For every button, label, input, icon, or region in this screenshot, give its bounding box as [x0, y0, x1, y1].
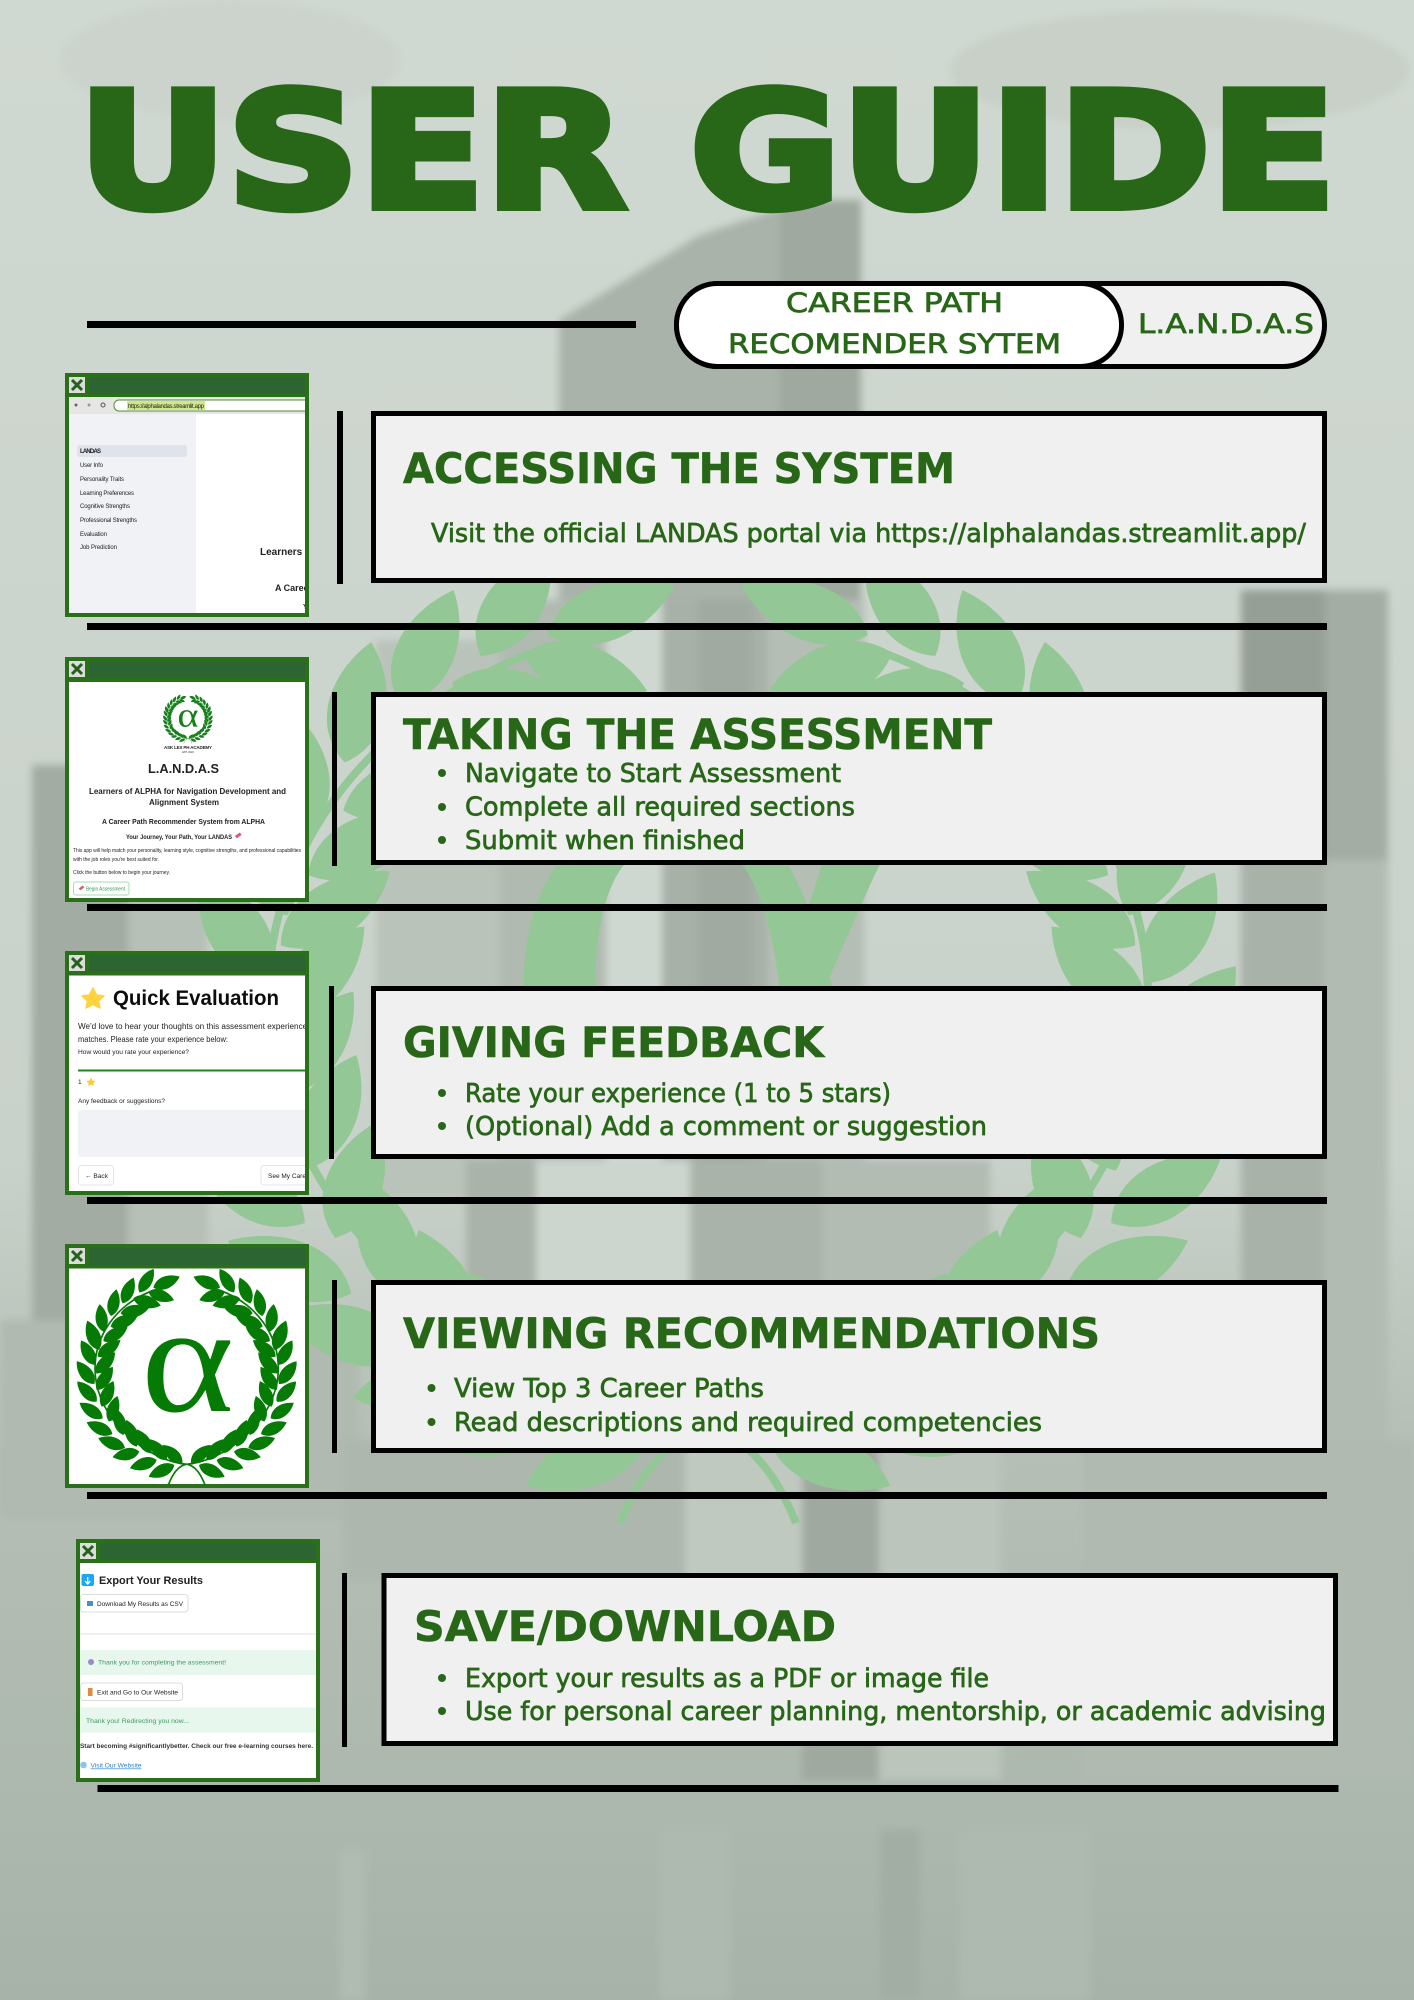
step 2 screenshot window: with the job roles you're best suited for. [73, 857, 159, 863]
pill label: landas: L.A.N.D.A.S [1138, 309, 1314, 340]
step 3 screenshot window [67, 953, 331, 1193]
bullet list [438, 1079, 987, 1142]
heading: ACCESSING THE SYSTEM [403, 444, 955, 493]
step 3 screenshot window: ← Back [85, 1173, 109, 1180]
step 2 screenshot window: Your Journey, Your Path, Your LANDAS [126, 834, 233, 841]
step 3 screenshot window: 1 [78, 1079, 82, 1086]
panel: taking the assessment [374, 694, 1324, 862]
step 5 screenshot window [78, 1541, 318, 1780]
bullet list: View Top 3 Career Paths [454, 1374, 764, 1404]
step 1 screenshot window: User Info [80, 463, 104, 469]
step 1 screenshot window: Evaluation [80, 532, 107, 538]
bullet list: Complete all required sections [465, 792, 855, 822]
panel: viewing recommendations [374, 1282, 1324, 1450]
step 1 screenshot window: Learning Preferences [80, 491, 134, 497]
bullet list: Read descriptions and required competencies [454, 1408, 1042, 1438]
step 3 screenshot window: Any feedback or suggestions? [78, 1098, 165, 1105]
step 5 screenshot window: Start becoming #significantlybetter. Check our free e-learning courses here. [80, 1743, 313, 1750]
panel: giving feedback [374, 988, 1324, 1156]
step 2 screenshot window: Alignment System [149, 797, 219, 807]
step 2 screenshot window: L.A.N.D.A.S [148, 761, 219, 776]
bullet list: Navigate to Start Assessment [465, 759, 841, 789]
icon: laurel wreath with alpha [72, 1266, 302, 1485]
background wreath emblem: α [493, 511, 917, 1300]
heading: GIVING FEEDBACK [403, 1018, 825, 1067]
logo: ASK LEX PH ACADEMY [164, 745, 212, 750]
step 5 screenshot window: Export Your Results [99, 1575, 203, 1587]
bullet list [428, 1374, 1042, 1438]
step 3 screenshot window: See My Career [268, 1173, 313, 1180]
heading: SAVE/DOWNLOAD [414, 1602, 836, 1651]
logo [162, 694, 214, 754]
step 1 screenshot window: Personality Traits [80, 477, 124, 483]
bullet list [438, 759, 855, 856]
step 2 screenshot window [67, 659, 307, 900]
title: USER GUIDE [78, 58, 1336, 245]
body text: Visit the official LANDAS portal via https://alphalandas.streamlit.app/ [431, 519, 1306, 549]
header rule [87, 321, 636, 328]
step 1 divider bar [337, 411, 343, 584]
step 1 screenshot window [65, 373, 309, 617]
bullet list: Rate your experience (1 to 5 stars) [465, 1079, 891, 1109]
step 4 logo window [67, 1246, 307, 1486]
bullet list: Export your results as a PDF or image file [465, 1664, 989, 1694]
step 1 screenshot window: Professional Strengths [80, 518, 137, 524]
icon: star [82, 988, 104, 1008]
step 1 screenshot window: Job Prediction [80, 545, 117, 551]
step 1 screenshot window: Learners of ALPHA [260, 547, 351, 558]
step 5 divider bar [342, 1573, 347, 1747]
step 5 screenshot window: Exit and Go to Our Website [97, 1690, 178, 1696]
step 2 screenshot window: This app will help match your personality, learning style, cognitive strengths, and professional capabilities [73, 848, 301, 854]
logo: α [177, 696, 199, 735]
bullet list: Use for personal career planning, mentorship, or academic advising [465, 1697, 1326, 1727]
step 4 divider bar [332, 1280, 337, 1453]
pill label: career path recommender: RECOMENDER SYTEM [728, 329, 1061, 360]
step 5 screenshot window: Thank you for completing the assessment! [98, 1660, 226, 1666]
heading: VIEWING RECOMMENDATIONS [403, 1309, 1100, 1358]
step 2 screenshot window: Begin Assessment [86, 886, 126, 892]
step 5 screenshot window: Download My Results as CSV [97, 1601, 184, 1608]
step 1 screenshot window: Cognitive Strengths [80, 504, 130, 510]
bullet list: (Optional) Add a comment or suggestion [465, 1112, 987, 1142]
panel: save/download [384, 1576, 1336, 1744]
step 2 screenshot window: A Career Path Recommender System from ALPHA [102, 819, 265, 826]
system name pill [676, 284, 1324, 366]
step 3 divider bar [329, 986, 334, 1159]
pill label: career path recommender [728, 288, 1061, 360]
step 5 screenshot window: Visit Our Website [90, 1762, 142, 1770]
step 1 screenshot window: LANDAS [80, 449, 101, 455]
step 1 screenshot window: Your [303, 604, 319, 611]
step 3 screenshot window: Quick Evaluation [113, 987, 279, 1010]
step 1 screenshot window: https://alphalandas.streamlit.app [128, 404, 205, 410]
step 3 screenshot window: We'd love to hear your thoughts on this assessment experience b [78, 1022, 315, 1031]
heading: TAKING THE ASSESSMENT [403, 710, 992, 759]
logo: EST. 2024 [182, 751, 194, 754]
step 1 screenshot window: A Career Path [275, 583, 334, 593]
bullet list: Submit when finished [465, 826, 745, 856]
bullet list [438, 1664, 1326, 1727]
step 2 divider bar [332, 692, 337, 866]
panel: accessing the system [374, 414, 1324, 580]
step 2 screenshot window: Click the button below to begin your journey. [73, 870, 170, 876]
pill label: career path recommender: CAREER PATH [786, 288, 1003, 319]
step 3 screenshot window: matches. Please rate your experience below: [78, 1035, 228, 1044]
step 2 screenshot window: Learners of ALPHA for Navigation Development and [89, 786, 286, 796]
step 3 screenshot window: How would you rate your experience? [78, 1049, 189, 1056]
step 5 screenshot window: Thank you! Redirecting you now... [86, 1718, 189, 1725]
icon: laurel wreath with alpha: α [141, 1275, 234, 1445]
